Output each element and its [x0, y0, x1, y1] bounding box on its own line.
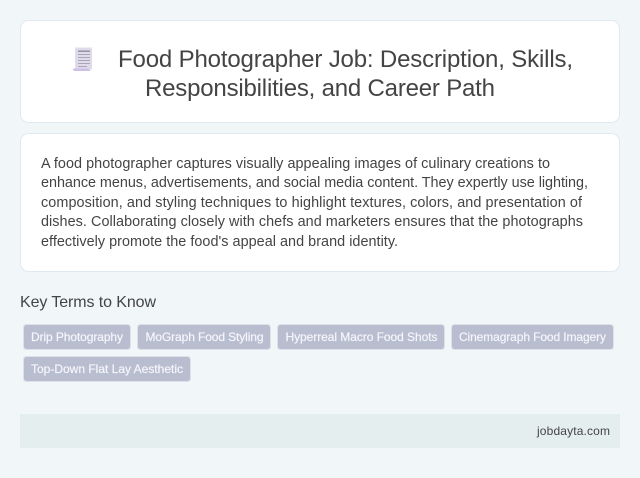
description text: effectively promote the food's appeal and brand identity.	[41, 234, 398, 250]
chip: Top-Down Flat Lay Aesthetic: Top-Down Flat Lay Aesthetic	[31, 362, 183, 376]
panel: title card	[20, 20, 620, 122]
title: Food Photographer Job: Description, Skills,	[118, 46, 573, 73]
footer bar	[20, 414, 620, 448]
description text: enhance menus, advertisements, and social media content. They expertly use lighting,	[41, 175, 588, 191]
chip: Hyperreal Macro Food Shots	[278, 324, 444, 350]
chip: MoGraph Food Styling	[138, 324, 270, 350]
chip: Top-Down Flat Lay Aesthetic	[24, 356, 190, 382]
chip: Drip Photography: Drip Photography	[31, 330, 123, 344]
chip: MoGraph Food Styling: MoGraph Food Styling	[146, 330, 264, 344]
panel: description	[20, 134, 620, 272]
description text: composition, and styling techniques to highlight textures, colors, and presentation of	[41, 195, 583, 211]
footer bar: jobdayta.com	[536, 424, 610, 438]
title: Responsibilities, and Career Path	[145, 75, 495, 102]
description text	[41, 156, 588, 250]
heading: key terms: Key Terms to Know	[20, 294, 156, 311]
title	[118, 46, 573, 102]
chip: Drip Photography	[24, 324, 130, 350]
description text: A food photographer captures visually appealing images of culinary creations to	[41, 156, 550, 172]
icon: document scroll	[73, 48, 92, 71]
chip: Cinemagraph Food Imagery: Cinemagraph Food Imagery	[459, 330, 606, 344]
description text: dishes. Collaborating closely with chefs and marketers ensures that the photographs	[41, 214, 583, 230]
chip: Hyperreal Macro Food Shots: Hyperreal Macro Food Shots	[286, 330, 438, 344]
chip: Cinemagraph Food Imagery	[452, 324, 614, 350]
